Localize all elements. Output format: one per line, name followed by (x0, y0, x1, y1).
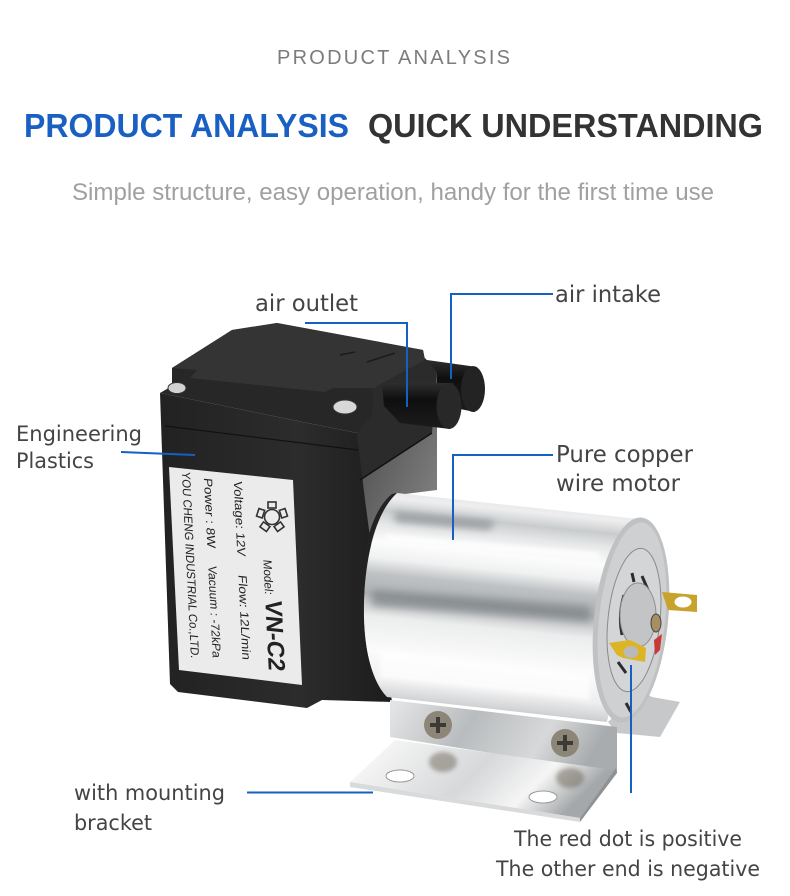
callout: air outlet: air outlet (255, 291, 358, 317)
callout: pure copper wire motor: Pure copper (556, 442, 694, 468)
nameplate: Flow: 12L/min (235, 574, 253, 661)
nameplate: Model: (260, 559, 276, 595)
title (24, 107, 763, 144)
motor end cap (583, 514, 697, 726)
callout: air intake (451, 282, 661, 379)
motor cylinder (361, 493, 647, 722)
subtitle: Simple structure, easy operation, handy for the first time use (72, 179, 714, 206)
callout: mounting bracket (74, 781, 373, 835)
nameplate: Power : 8W (201, 477, 218, 549)
body screws (168, 382, 357, 414)
nameplate: YOU CHENG INDUSTRIAL Co.,LTD. (179, 471, 202, 659)
callout: engineering plastics: Plastics (16, 449, 94, 473)
callout: polarity note: The other end is negative (495, 857, 760, 881)
callout: air outlet (255, 291, 407, 407)
callout: pure copper wire motor: wire motor (556, 471, 681, 497)
rear terminal (662, 592, 697, 612)
callout: mounting bracket: with mounting (74, 781, 225, 805)
callout: air intake: air intake (555, 282, 661, 308)
air intake nozzle (420, 360, 485, 412)
nameplate: Voltage: 12V (231, 480, 248, 557)
callout: polarity note: The red dot is positive (513, 827, 742, 851)
nameplate: Vacuum : -72kPa (205, 565, 224, 659)
red polarity dot (654, 634, 662, 655)
callout: engineering plastics: Engineering (16, 422, 142, 446)
callout: pure copper wire motor (453, 442, 694, 540)
callout: polarity note (495, 665, 760, 881)
title: PRODUCT ANALYSIS (24, 107, 349, 144)
motor shaft (651, 614, 661, 632)
bracket screw right (551, 729, 579, 757)
front terminal (609, 640, 646, 662)
page eyebrow: PRODUCT ANALYSIS (277, 47, 510, 69)
pump body (160, 323, 437, 708)
title: QUICK UNDERSTANDING (368, 107, 763, 144)
callout: mounting bracket: bracket (74, 811, 152, 835)
rear bracket foot (608, 690, 680, 737)
model name: VN-C2 (259, 599, 290, 672)
nameplate logo (256, 502, 288, 531)
callout: engineering plastics (16, 422, 195, 473)
bracket holes (386, 770, 557, 803)
product illustration: vacuum pump (160, 323, 697, 822)
bracket screw left (424, 711, 452, 739)
nameplate (169, 467, 302, 685)
air outlet nozzle (382, 383, 462, 429)
mounting bracket (350, 700, 617, 822)
